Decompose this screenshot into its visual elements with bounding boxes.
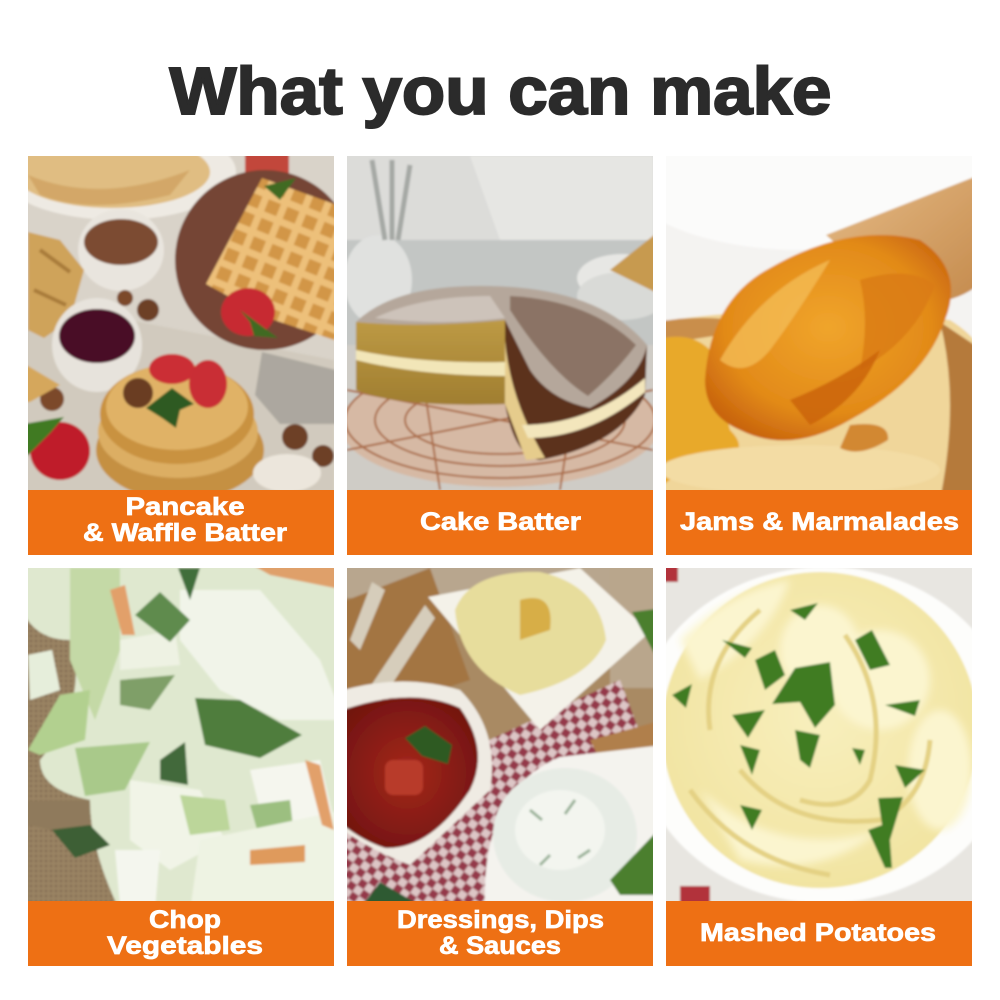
label bar (666, 490, 972, 555)
label text: Mashed Potatoes (700, 919, 936, 947)
label text (107, 906, 263, 960)
label bar (28, 901, 334, 966)
panel: mashed potatoes (666, 568, 972, 966)
panel: cake batter (337, 146, 667, 555)
photo: pancakes and waffles (28, 156, 334, 490)
label bar (28, 490, 334, 555)
label text: Vegetables (107, 932, 263, 960)
label text: & Waffle Batter (83, 519, 287, 547)
panel: dressings, dips and sauces (337, 558, 663, 966)
label text (397, 906, 604, 960)
photo: chopped cabbage salad (28, 568, 334, 901)
panel: pancake and waffle batter (28, 156, 334, 555)
label text: Dressings, Dips (397, 906, 604, 934)
label text: & Sauces (439, 932, 561, 960)
label text: Chop (149, 906, 221, 934)
label text: Cake Batter (420, 508, 581, 536)
label text: Jams & Marmalades (680, 508, 959, 536)
photo: sponge cake (347, 156, 653, 490)
title: What you can make (170, 54, 832, 129)
label bar (666, 901, 972, 966)
label bar (347, 490, 653, 555)
photo: mashed potatoes with parsley (666, 568, 972, 901)
photo: dips in white bowls (347, 568, 653, 901)
panel: jams and marmalades (666, 176, 972, 555)
label text: Pancake (126, 493, 245, 521)
label text (83, 493, 287, 547)
photo: marmalade on toast (666, 176, 972, 490)
label bar (347, 901, 653, 966)
panel: chop vegetables (18, 558, 344, 966)
